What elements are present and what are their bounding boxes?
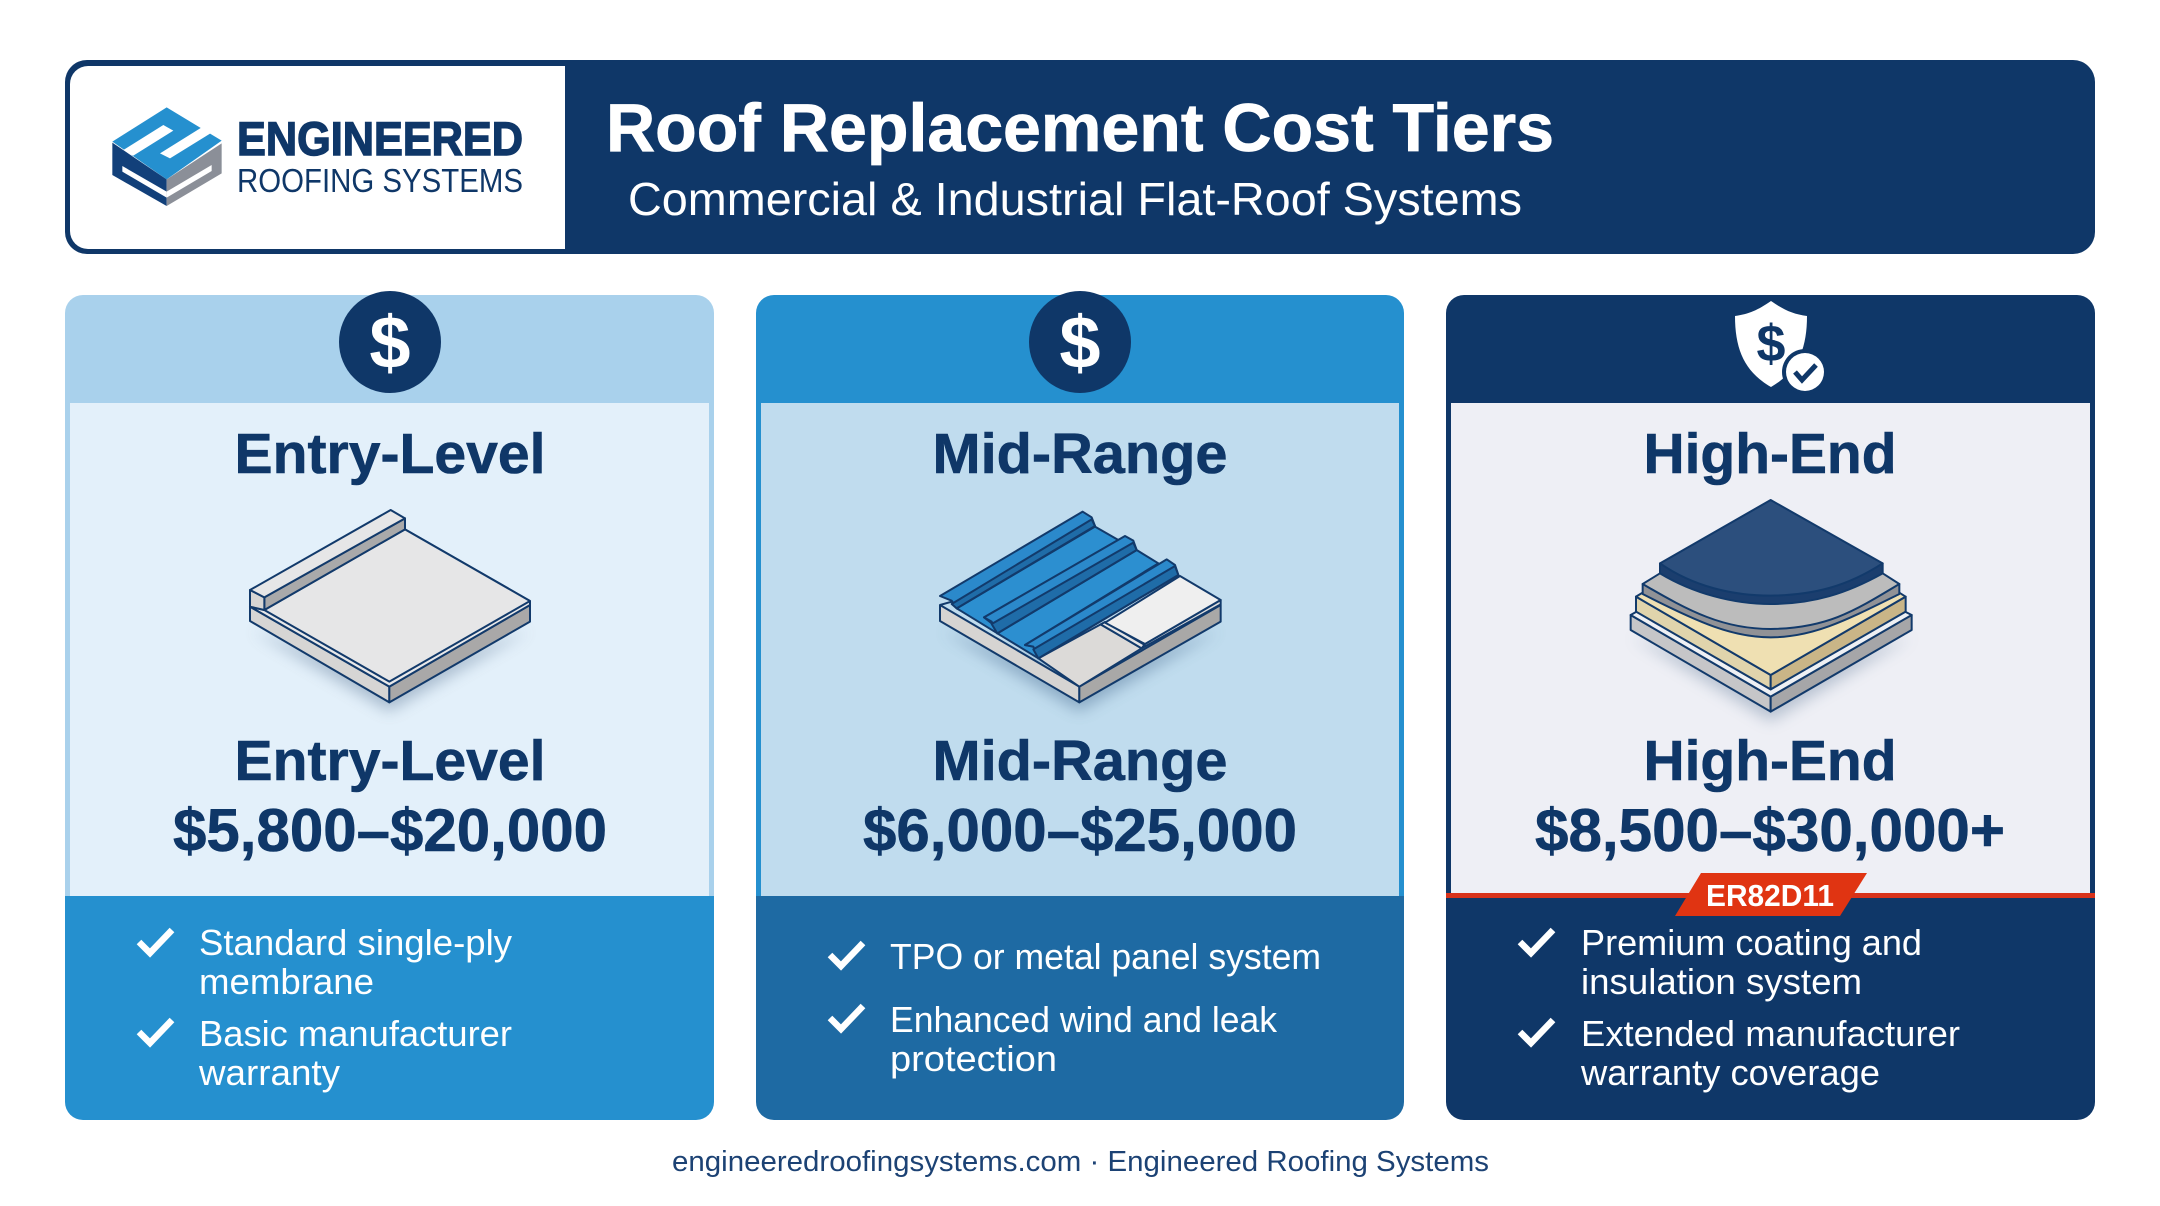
- feature list: Standard single-ply: [199, 922, 512, 963]
- footer text: engineeredroofingsystems.com · Engineered Roofing Systems: [672, 1146, 1489, 1178]
- badge: code: [1675, 873, 1867, 916]
- illustration: layered roof: [1631, 500, 1912, 722]
- panel: high-end: [1446, 295, 2095, 1120]
- feature list: [1520, 922, 1960, 1093]
- icon: dollar circle: $: [1059, 301, 1101, 384]
- heading: High-End: [1644, 422, 1896, 486]
- title: Roof Replacement Cost Tiers: [606, 90, 1554, 166]
- red divider: [1446, 893, 2095, 898]
- icon: shield with dollar and check: [1735, 301, 1828, 395]
- feature list: membrane: [199, 961, 374, 1002]
- logo wordmark: ROOFING SYSTEMS: [237, 162, 523, 199]
- feature list: insulation system: [1581, 961, 1862, 1002]
- feature list: Extended manufacturer: [1581, 1013, 1960, 1054]
- illustration: single-ply roof: [250, 510, 530, 712]
- feature list: Premium coating and: [1581, 922, 1922, 963]
- feature list: warranty coverage: [1580, 1052, 1880, 1093]
- icon: dollar circle: $: [369, 301, 411, 384]
- illustration: metal panel roof: [940, 512, 1221, 712]
- feature list: Basic manufacturer: [199, 1013, 512, 1054]
- panel: mid-range: [756, 291, 1404, 1120]
- icon: logo cube: [112, 107, 222, 206]
- feature list: Enhanced wind and leak: [890, 999, 1278, 1040]
- panel: entry-level: [65, 291, 714, 1120]
- logo wordmark: ENGINEERED: [237, 112, 523, 165]
- feature list: [830, 936, 1321, 1079]
- badge: code: ER82D11: [1706, 878, 1834, 913]
- logo panel: [70, 66, 565, 249]
- logo wordmark: [237, 112, 523, 199]
- heading: Mid-Range: [932, 422, 1228, 486]
- tier name: Entry-Level: [234, 729, 546, 793]
- price range: $6,000–$25,000: [863, 797, 1297, 864]
- feature list: [139, 922, 512, 1093]
- feature list: warranty: [198, 1052, 340, 1093]
- heading: Entry-Level: [234, 422, 546, 486]
- icon: dollar circle: [339, 291, 441, 393]
- price range: $5,800–$20,000: [173, 797, 607, 864]
- tier name: High-End: [1644, 729, 1896, 793]
- tier name: Mid-Range: [932, 729, 1228, 793]
- header banner: [65, 60, 2095, 254]
- icon: dollar circle: [1029, 291, 1131, 393]
- price range: $8,500–$30,000+: [1535, 797, 2005, 864]
- subtitle: Commercial & Industrial Flat-Roof Systems: [628, 173, 1522, 225]
- icon: shield with dollar and check: $: [1757, 315, 1786, 373]
- feature list: protection: [890, 1038, 1057, 1079]
- feature list: TPO or metal panel system: [890, 936, 1321, 977]
